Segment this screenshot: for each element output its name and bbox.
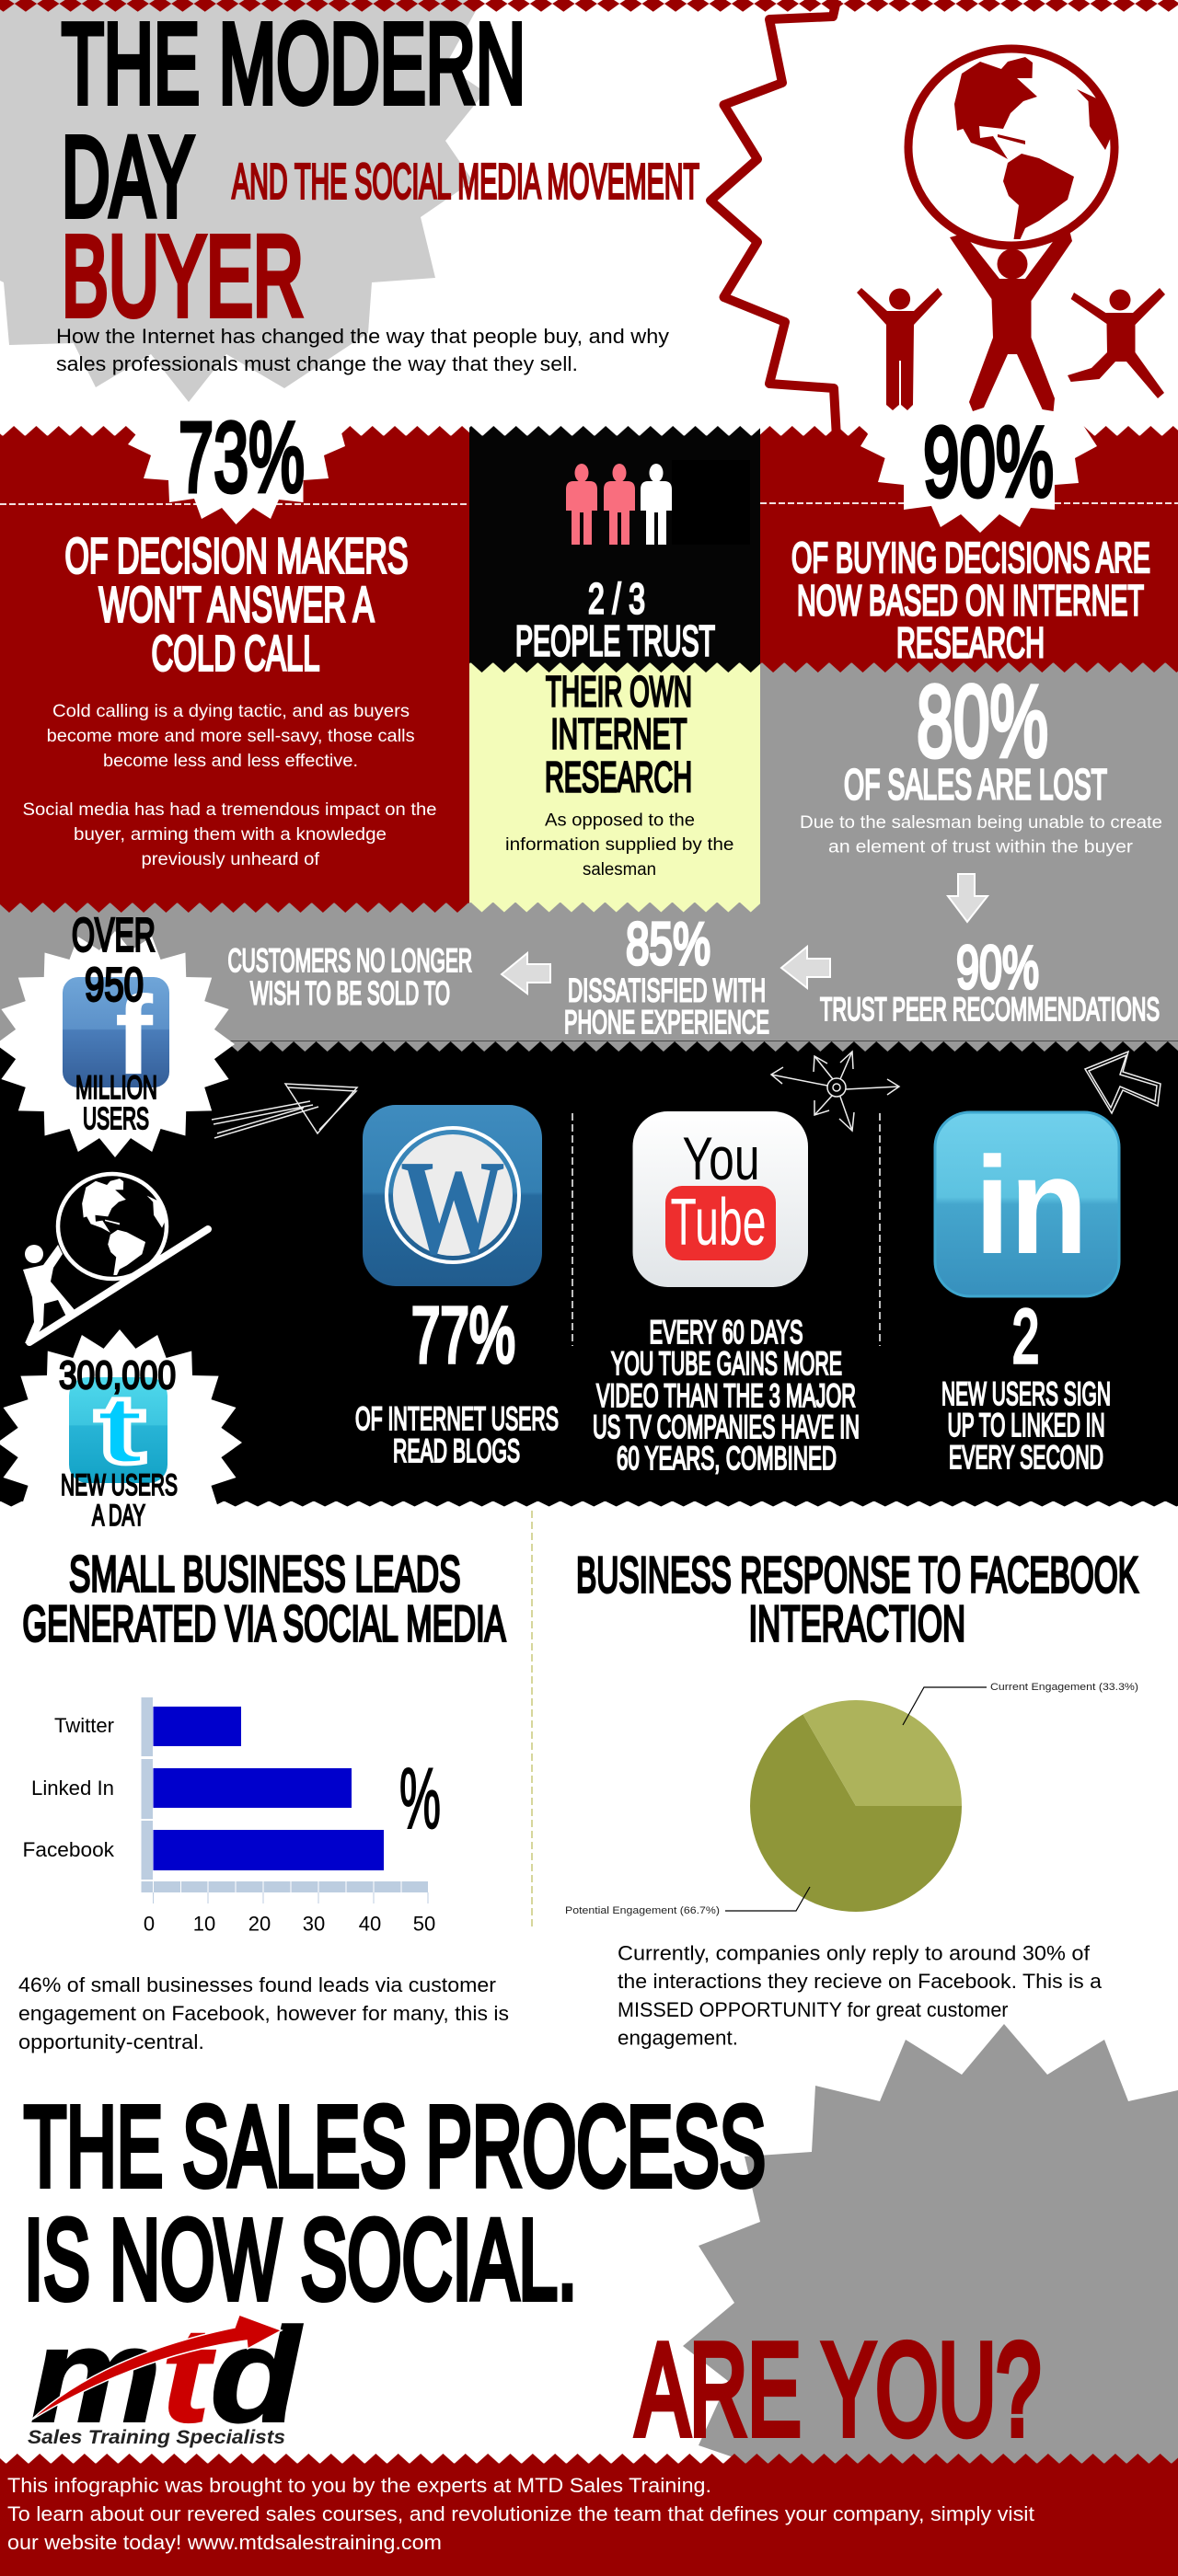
panel: black people trust [469, 426, 760, 673]
title: DAY [62, 114, 194, 241]
stat: youtube video [593, 1315, 860, 1477]
stat: 73 percent badge [128, 402, 345, 524]
bar chart: % [399, 1750, 441, 1846]
text: cold calling: Social media has had a tremendous impact on the [22, 800, 437, 820]
heading: their own internet research: INTERNET [550, 710, 687, 758]
text: as opposed: information supplied by the [505, 835, 734, 855]
heading: decision makers: WON'T ANSWER A [99, 578, 374, 633]
heading: small business leads: GENERATED VIA SOCIAL MEDIA [22, 1595, 506, 1652]
panel: footer: To learn about our revered sales courses, and revolutionize the team that defines your company, simply visit [7, 2502, 1034, 2525]
panel: decision makers [0, 426, 472, 913]
heading: their own internet research: RESEARCH [545, 753, 692, 801]
arrow: down [948, 874, 987, 922]
badge: twitter users [0, 1329, 242, 1556]
text: missed opportunity [618, 1941, 1103, 2050]
text: cold calling: become less and less effective. [103, 752, 358, 771]
pie chart: Potential Engagement (66.7%) [565, 1905, 720, 1916]
heading: their own internet research [545, 668, 692, 801]
stat: 85 percent: PHONE EXPERIENCE [564, 1005, 769, 1041]
pie chart [565, 1682, 1138, 1916]
stat: 77 percent blogs [355, 1292, 559, 1469]
text: missed opportunity: the interactions they recieve on Facebook. This is a [618, 1970, 1103, 1993]
badge: twitter users: A DAY [92, 1499, 145, 1532]
heading: two thirds: 2 / 3 [588, 575, 645, 623]
heading: their own internet research: THEIR OWN [546, 668, 692, 716]
stat: youtube video: US TV COMPANIES HAVE IN [593, 1409, 860, 1445]
closing headline [24, 2083, 766, 2324]
heading: small business leads [22, 1546, 506, 1652]
stat: 90 percent badge [860, 407, 1097, 533]
closing starburst background [683, 2024, 1178, 2475]
panel: footer [0, 2454, 1178, 2576]
text: cold calling [22, 702, 437, 869]
text: missed opportunity: MISSED OPPORTUNITY for great customer [618, 1998, 1009, 2021]
logo: mtd sales training: mtd [30, 2300, 303, 2450]
icon: figure pushing globe uphill [23, 1174, 208, 1343]
text: customers no longer: CUSTOMERS NO LONGER [228, 943, 472, 979]
heading: business response: INTERACTION [749, 1595, 965, 1652]
text: as opposed: salesman [583, 860, 656, 880]
stat: youtube video: EVERY 60 DAYS [650, 1315, 803, 1351]
text: as opposed [505, 811, 734, 880]
text: salesman trust: Due to the salesman being unable to create [800, 813, 1162, 833]
text: small business leads: 46% of small businesses found leads via customer [18, 1973, 496, 1996]
bar chart [22, 1697, 441, 1936]
icon: three people [566, 464, 672, 545]
panel: yellow internet research [469, 662, 760, 913]
icon: twitter [69, 1375, 167, 1484]
intro text: sales professionals must change the way that they sell. [56, 352, 578, 375]
arrow: left from phone [502, 953, 550, 994]
badge: facebook users [0, 909, 235, 1157]
icon: sketched compass arrows [771, 1052, 899, 1131]
text: salesman trust: an element of trust within the buyer [828, 837, 1134, 857]
heading: decision makers: OF DECISION MAKERS [64, 528, 409, 583]
top zigzag border [0, 0, 1178, 12]
closing headline: IS NOW SOCIAL. [24, 2197, 577, 2324]
stat: 77 percent blogs: READ BLOGS [393, 1433, 520, 1469]
text: cold calling: become more and more sell-savy, those calls [47, 727, 415, 746]
bar chart: 0 [144, 1912, 155, 1936]
bar chart: 30 [303, 1912, 325, 1936]
icon: youtube: You [683, 1124, 760, 1192]
text: small business leads: opportunity-central. [18, 2030, 204, 2053]
stat: 90 percent trust peers: 90% [956, 933, 1039, 1001]
icon: twitter: t [95, 1375, 145, 1484]
title [62, 0, 525, 340]
divider dashes [572, 1113, 573, 1346]
icon: hero burst outline [710, 0, 837, 438]
stat: linkedin two per second [941, 1295, 1111, 1476]
bar chart: 20 [248, 1912, 271, 1936]
stat: 85 percent: 85% [626, 910, 710, 977]
badge: twitter users: NEW USERS [61, 1468, 178, 1501]
heading: decision makers [64, 528, 409, 681]
bar chart: 50 [413, 1912, 435, 1936]
icon: wordpress [363, 1105, 542, 1286]
text: customers no longer [228, 943, 472, 1012]
stat: 77 percent blogs: OF INTERNET USERS [355, 1401, 559, 1437]
icon: wordpress: W [400, 1133, 505, 1283]
text: small business leads [18, 1973, 509, 2053]
title: THE MODERN [62, 0, 525, 127]
stat: 85 percent: DISSATISFIED WITH [568, 973, 766, 1008]
bar chart: Twitter [54, 1714, 114, 1737]
icon: facebook: f [115, 972, 153, 1098]
text: missed opportunity: Currently, companies only reply to around 30% of [618, 1941, 1091, 1965]
heading: buying decisions [791, 534, 1150, 667]
badge: facebook users: USERS [83, 1101, 149, 1135]
icon: people lifting the globe [857, 49, 1165, 411]
heading: business response [576, 1546, 1138, 1652]
heading: two thirds [515, 575, 715, 665]
text: missed opportunity: engagement. [618, 2026, 738, 2050]
stat: 73 percent badge: 73% [179, 402, 305, 512]
grey band background [0, 662, 1178, 1041]
badge: twitter users: 300,000 [59, 1353, 176, 1397]
text: small business leads: engagement on Facebook, however for many, this is [18, 2002, 509, 2025]
stat: 77 percent blogs: 77% [411, 1292, 515, 1380]
stat: 80 percent: 80% [917, 665, 1048, 778]
icon: youtube: Tube [670, 1186, 766, 1259]
stat: youtube video: 60 YEARS, COMBINED [617, 1441, 837, 1477]
text: customers no longer: WISH TO BE SOLD TO [250, 975, 450, 1012]
heading: small business leads: SMALL BUSINESS LEADS [69, 1546, 460, 1603]
intro text [56, 325, 669, 375]
icon: facebook [63, 972, 169, 1098]
icon: sketched arrow to wordpress [212, 1084, 357, 1138]
section divider [531, 1511, 533, 1929]
panel: black social media band [0, 1041, 1178, 1507]
panel: footer: This infographic was brought to you by the experts at MTD Sales Training. [7, 2474, 711, 2497]
text: as opposed: As opposed to the [545, 811, 695, 830]
stat: 90 percent trust peers [820, 933, 1160, 1028]
logo: mtd sales training: Sales Training Specialists [28, 2427, 285, 2448]
stat: youtube video: VIDEO THAN THE 3 MAJOR [596, 1378, 856, 1414]
bar chart: Facebook [22, 1838, 115, 1861]
stat: 85 percent [564, 910, 769, 1041]
heading: buying decisions: RESEARCH [896, 619, 1045, 667]
icon: linkedin: in [975, 1128, 1088, 1282]
badge: facebook users: MILLION [75, 1070, 157, 1106]
icon: sketched pointer arrow [1085, 1052, 1161, 1113]
icon: youtube [633, 1111, 808, 1287]
stat: youtube video: YOU TUBE GAINS MORE [611, 1346, 842, 1382]
bar chart: 10 [193, 1912, 215, 1936]
text: cold calling: previously unheard of [142, 850, 320, 869]
text: cold calling: buyer, arming them with a knowledge [74, 825, 387, 845]
bar chart: 40 [359, 1912, 381, 1936]
panel: buying decisions [760, 426, 1178, 673]
badge: facebook users: 950 [85, 959, 144, 1010]
text: cold calling: Cold calling is a dying tactic, and as buyers [52, 702, 410, 721]
arrow: left from trust [781, 947, 830, 988]
pie chart: Current Engagement (33.3%) [990, 1682, 1138, 1693]
panel: footer: our website today! www.mtdsalestraining.com [7, 2531, 442, 2554]
divider dashes [0, 503, 469, 505]
title: BUYER [62, 213, 304, 340]
icon: linkedin [935, 1112, 1119, 1296]
heading: decision makers: COLD CALL [151, 626, 320, 681]
stat: 80 percent [844, 665, 1107, 809]
stat: 90 percent badge: 90% [923, 407, 1054, 517]
intro text: How the Internet has changed the way that people buy, and why [56, 325, 669, 348]
bar chart: Linked In [31, 1777, 114, 1800]
badge: facebook users: OVER [72, 909, 156, 960]
header starburst background [0, 0, 485, 402]
stat: linkedin two per second: 2 [1012, 1295, 1039, 1378]
heading: two thirds: PEOPLE TRUST [515, 617, 715, 665]
text: salesman trust [800, 813, 1162, 857]
subtitle: AND THE SOCIAL MEDIA MOVEMENT [232, 155, 699, 210]
